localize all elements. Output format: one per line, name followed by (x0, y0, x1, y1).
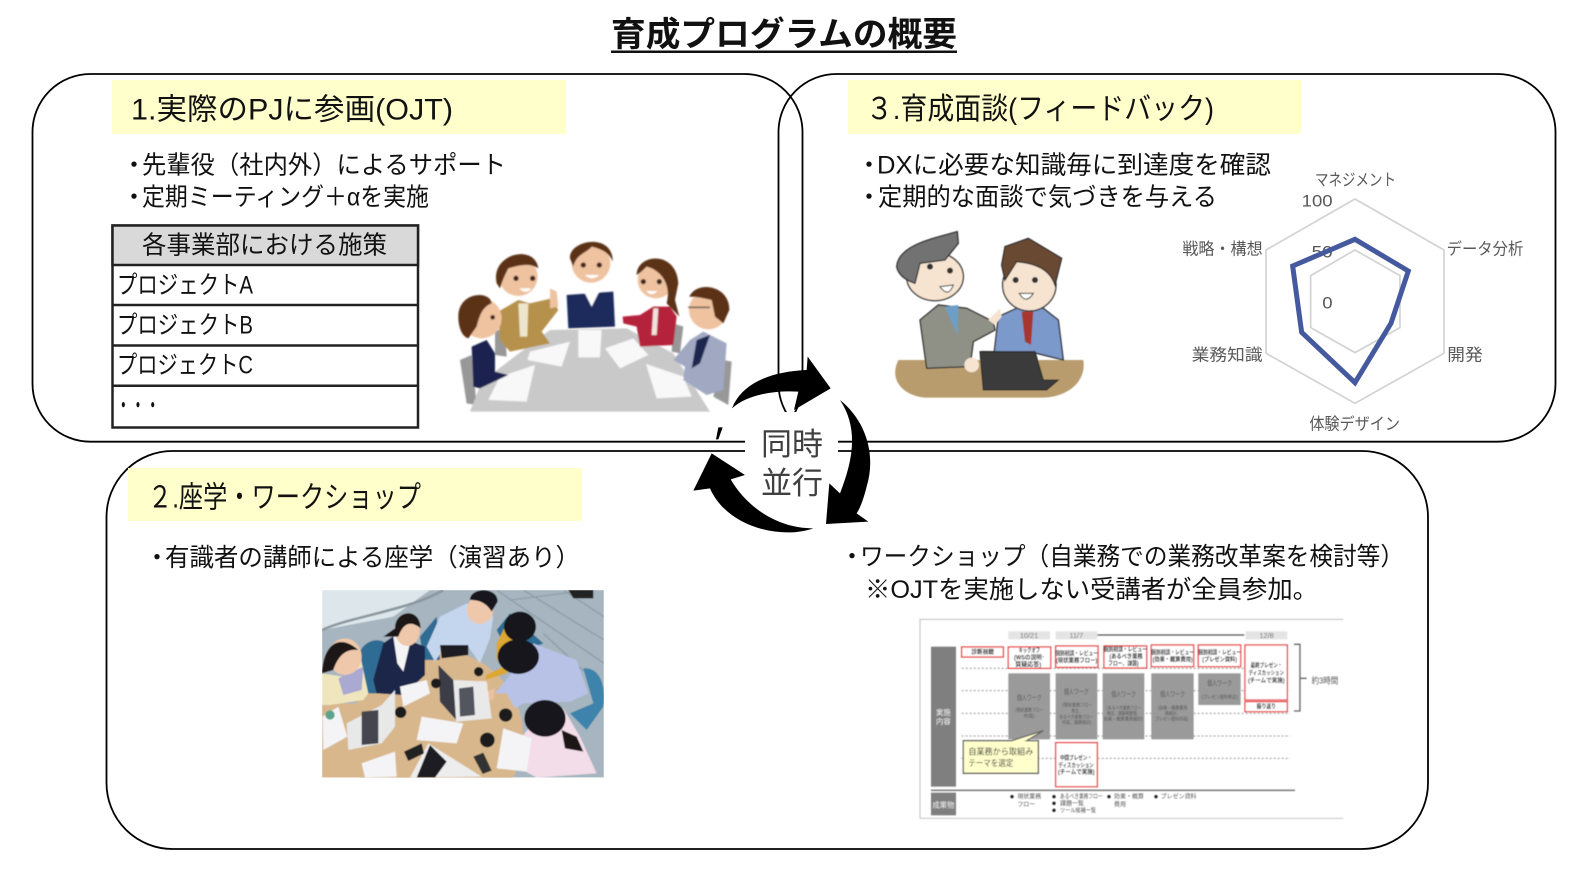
heading: 3 feedback (848, 80, 1301, 134)
text: concurrent label: 同時 (761, 427, 823, 462)
table: measures by division: プロジェクトB (117, 312, 253, 340)
chart: workshop schedule: (チームで実施) (1248, 676, 1285, 684)
chart: workshop schedule: 振り返り (1257, 703, 1276, 711)
text: workshop bullets (839, 543, 1404, 604)
chart: workshop schedule: 個別相談・レビュー (1198, 649, 1241, 657)
panel: 2 workshop outline (106, 451, 1428, 849)
chart: workshop schedule: 11/7 (1069, 631, 1083, 640)
text: feedback bullets: DXに必要な知識毎に到達度を確認 (877, 152, 1271, 180)
chart: workshop schedule: ディスカッション (1249, 669, 1284, 677)
chart: workshop schedule: 最終プレゼン・ (1251, 662, 1282, 670)
chart: workshop schedule: 課題一覧 (1060, 800, 1084, 808)
chart: workshop schedule: 内容 (936, 717, 951, 726)
chart: workshop schedule: (現状業務フロー) (1056, 656, 1097, 664)
chart: workshop schedule: あるべき業務フロー (1059, 713, 1094, 720)
title: 育成プログラムの概要 (611, 16, 957, 54)
center mask behind the cycle (745, 412, 838, 520)
chart: workshop schedule: 12/8 (1259, 631, 1274, 640)
heading: 2 workshop: ２.座学・ワークショップ (148, 482, 421, 514)
chart: workshop schedule: 個別相談・レビュー (1104, 646, 1147, 654)
chart: workshop schedule: (プレゼン資料修正) (1202, 693, 1238, 700)
chart: workshop schedule: (効果・概算費用) (1153, 656, 1193, 664)
table: measures by division (112, 226, 418, 428)
radar category labels: 開発 (1447, 346, 1483, 365)
chart: workshop schedule: 個人ワーク (1160, 690, 1185, 699)
chart: workshop schedule: フロー、課題) (1108, 661, 1139, 668)
chart: workshop schedule: テーマを選定 (968, 758, 1013, 768)
radar grid (1266, 199, 1444, 403)
text: feedback bullets: 定期的な面談で気づきを与える (878, 184, 1217, 212)
illustration: team meeting (458, 242, 732, 412)
text: workshop bullets: ワークショップ（自業務での業務改革案を検討等） (860, 543, 1404, 571)
text: OJT bullets: 先輩役（社内外）によるサポート (142, 152, 506, 180)
chart: workshop schedule: フロー (1017, 801, 1035, 808)
text: lecture bullet: ・ (144, 544, 170, 572)
chart: workshop schedule: キックオフ (1019, 646, 1040, 654)
heading: 1 OJT: 1.実際のPJに参画(OJT) (131, 94, 453, 126)
chart: workshop schedule: 中間プレゼン・ (1060, 754, 1092, 762)
chart: workshop schedule: プレゼン資料作成) (1155, 716, 1189, 723)
chart: workshop schedule: 個人ワーク (1017, 693, 1042, 702)
chart: workshop schedule: 現状業務 (1017, 793, 1041, 801)
radar axis values: 50 (1312, 243, 1333, 262)
chart: workshop schedule: 再検討、 (1165, 710, 1180, 717)
icon: cycle arrows (693, 357, 870, 532)
chart: workshop schedule: あるべき業務フロー (1060, 793, 1103, 801)
chart: workshop schedule: (現状業務フロー (1015, 707, 1044, 714)
chart: workshop schedule: 約3時間 (1312, 674, 1338, 685)
chart: workshop schedule: (プレゼン資料) (1202, 656, 1237, 664)
arrow: top (732, 357, 831, 410)
chart: workshop schedule: 質疑応答) (1015, 660, 1041, 668)
chart: workshop schedule: 診断視聴 (971, 648, 994, 656)
chart: workshop schedule: 個人ワーク (1064, 687, 1089, 696)
radar category labels: マネジメント (1315, 170, 1396, 189)
chart: workshop schedule: 修正、 (1072, 708, 1082, 715)
radar axis values: 100 (1302, 192, 1333, 211)
heading: 1 OJT (112, 80, 566, 134)
chart: workshop schedule: ツール候補一覧 (1060, 807, 1096, 815)
chart: workshop schedule: (あるべき業務フロー (1107, 704, 1142, 711)
chart: workshop schedule: 実施 (936, 708, 951, 717)
text: lecture bullet: 有識者の講師による座学（演習あり） (165, 544, 580, 572)
panel: 3 feedback outline (778, 74, 1556, 442)
illustration: mentor and trainee (895, 232, 1084, 398)
chart: workshop schedule: 成果物 (932, 800, 954, 809)
chart: workshop schedule: 作成、課題検討) (1062, 719, 1092, 726)
table: measures by division: プロジェクトC (117, 352, 253, 380)
chart: workshop schedule: 費用 (1114, 800, 1126, 808)
text: feedback bullets: ・ (856, 152, 882, 180)
panel: 1 OJT outline (32, 74, 802, 442)
chart: workshop schedule: 効果・概算 (1114, 793, 1144, 801)
chart: workshop schedule: 作成) (1024, 713, 1035, 720)
radar category labels: データ分析 (1447, 239, 1524, 259)
chart: workshop schedule: 個別相談・レビュー (1151, 649, 1194, 657)
chart: workshop schedule: プレゼン資料 (1161, 793, 1197, 801)
text: concurrent label: 並行 (761, 466, 823, 501)
chart: workshop schedule: (チームで実施) (1058, 768, 1095, 776)
arrow: right (826, 400, 870, 524)
chart: workshop schedule: 個人ワーク (1207, 678, 1232, 687)
radar axis values: 0 (1322, 294, 1333, 313)
chart: workshop schedule: ディスカッション (1058, 761, 1094, 769)
heading: 2 workshop (128, 468, 582, 521)
text: workshop bullets: ※OJTを実施しない受講者が全員参加。 (865, 576, 1318, 604)
table: measures by division: 各事業部における施策 (142, 232, 387, 260)
photo: group discussion around a table (322, 590, 604, 778)
radar data line (1293, 239, 1408, 383)
chart: workshop schedule (920, 619, 1343, 818)
chart: workshop schedule: (あるべき業務 (1109, 653, 1143, 661)
text: OJT bullets: ・ (121, 184, 147, 212)
heading: 3 feedback: ３.育成面談(フィードバック) (866, 93, 1214, 126)
chart: workshop schedule: 効果・概算費用検討) (1104, 716, 1143, 723)
radar category labels (1182, 170, 1524, 433)
chart: workshop schedule: 個別相談・レビュー (1055, 649, 1098, 657)
chart: workshop schedule: (現状業務フロー (1062, 702, 1093, 709)
text: OJT bullets: ・ (121, 152, 147, 180)
text: OJT bullets: 定期ミーティング＋αを実施 (142, 184, 429, 212)
chart: workshop schedule: (WSの説明･ (1014, 653, 1045, 661)
table: measures by division: プロジェクトA (117, 272, 253, 300)
chart: workshop schedule: 10/21 (1020, 631, 1038, 640)
text: OJT bullets (121, 152, 506, 212)
chart: workshop schedule: (効果・概算費用 (1158, 704, 1188, 711)
radar category labels: 業務知識 (1192, 346, 1263, 365)
radar axis values (1302, 192, 1333, 313)
text: feedback bullets: ・ (856, 184, 882, 212)
chart: radar skill chart (1182, 170, 1524, 433)
arrow end sliver (716, 427, 723, 439)
text: feedback bullets (856, 152, 1271, 212)
radar category labels: 体験デザイン (1309, 413, 1400, 433)
table: measures by division: ・・・ (116, 392, 160, 420)
chart: workshop schedule: 個人ワーク (1111, 690, 1136, 699)
radar category labels: 戦略・構想 (1182, 240, 1263, 259)
text: workshop bullets: ・ (839, 543, 865, 571)
chart: workshop schedule: 修正、課題再整理、 (1107, 710, 1140, 717)
text: concurrent label (761, 427, 823, 501)
arrow: left (693, 453, 813, 532)
chart: workshop schedule: 自業務から取組み (968, 746, 1033, 756)
